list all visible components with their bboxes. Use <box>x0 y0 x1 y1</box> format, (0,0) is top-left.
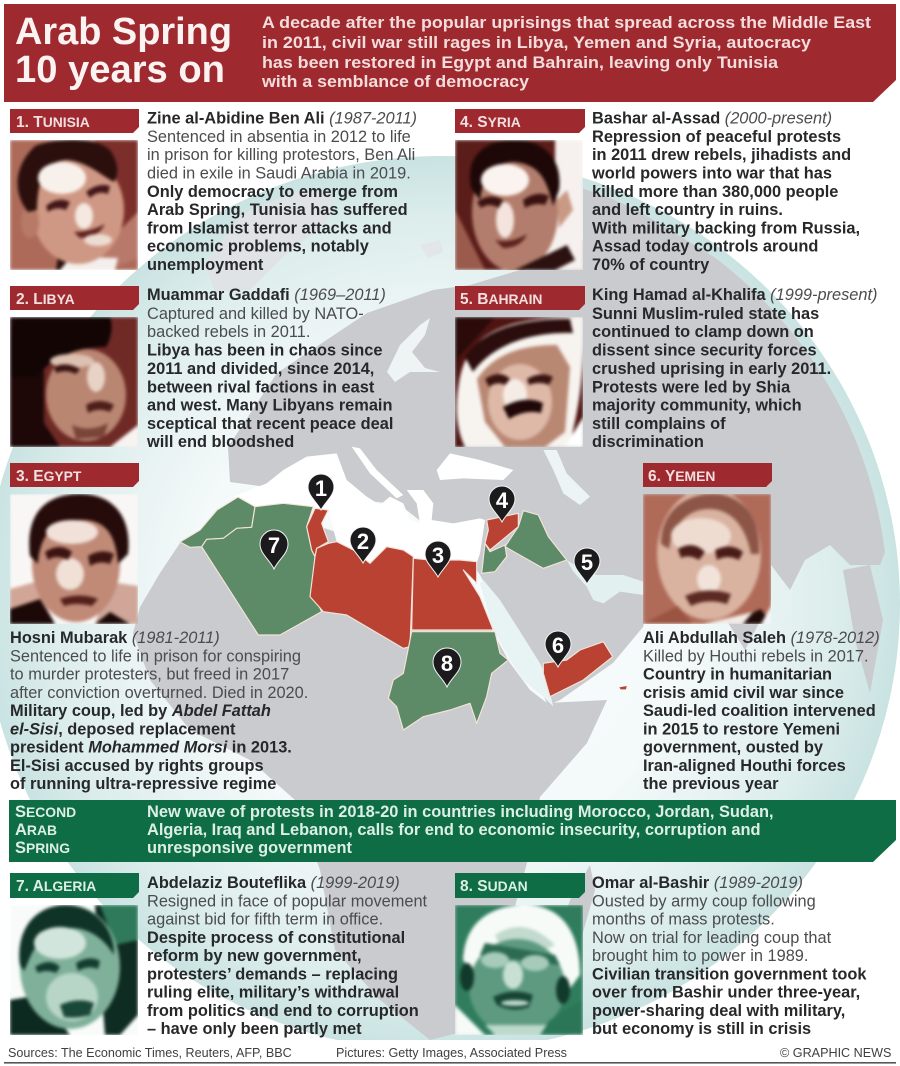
portrait: Mubarak <box>10 494 138 624</box>
banner text <box>147 803 774 857</box>
text: Bouteflika: – have only been partly met <box>147 1020 362 1038</box>
country: Libya <box>310 542 413 648</box>
text: Bouteflika: protesters’ demands – replacing <box>147 966 398 984</box>
country: Morocco <box>180 497 255 547</box>
text: Hamad: still complains of <box>592 415 726 433</box>
intro text: has been restored in Egypt and Bahrain, leaving only Tunisia <box>262 53 779 72</box>
label: Egypt: 3. EGYPT <box>16 468 82 485</box>
text: Assad: in 2011 drew rebels, jihadists and <box>592 146 851 164</box>
text: Bashir <box>592 874 867 1038</box>
text: Assad: killed more than 380,000 people <box>592 183 838 201</box>
portrait: Gaddafi <box>10 317 138 447</box>
text: Assad: Repression of peaceful protests <box>592 128 841 146</box>
text: Gaddafi: between rival factions in east <box>147 378 375 396</box>
text: Gaddafi: backed rebels in 2011. <box>147 323 310 341</box>
pin 7 Algeria: 7 <box>268 533 280 558</box>
header banner <box>4 4 896 102</box>
text: Mubarak: El-Sisi accused by rights groups <box>10 757 264 775</box>
portrait: Saleh <box>643 488 771 624</box>
text: Hamad: majority community, which <box>592 396 802 414</box>
pin 7 Algeria <box>260 530 288 569</box>
text: Bashir: months of mass protests. <box>592 910 775 928</box>
text: Ben Ali: died in exile in Saudi Arabia in 2019. <box>147 164 411 182</box>
banner heading: SECOND <box>15 803 76 821</box>
text: Assad: Assad today controls around <box>592 238 818 256</box>
pin 2 Libya <box>350 527 376 563</box>
banner heading <box>15 803 76 857</box>
banner text: New wave of protests in 2018-20 in countries including Morocco, Jordan, Sudan, <box>147 803 774 821</box>
intro text <box>261 13 871 91</box>
pin 4 Syria <box>489 486 515 522</box>
text: Assad: and left country in ruins. <box>592 201 783 219</box>
text: Saleh: government, ousted by <box>643 738 824 756</box>
intro text: in 2011, civil war still rages in Libya, Yemen and Syria, autocracy <box>262 33 812 52</box>
label: Bahrain: 5. BAHRAIN <box>460 291 542 308</box>
text: Hamad: continued to clamp down on <box>592 323 814 341</box>
text: Ben Ali: Zine al-Abidine Ben Ali (1987-2011) <box>147 110 417 128</box>
label: Libya: 2. LIBYA <box>16 291 75 308</box>
text: Hamad <box>592 286 877 451</box>
map pins <box>260 474 600 687</box>
country: Syria <box>485 513 518 550</box>
label: Sudan: 8. SUDAN <box>460 878 528 895</box>
text: Bouteflika: from politics and end to corruption <box>147 1002 419 1020</box>
label: Syria: 4. SYRIA <box>460 114 521 131</box>
text: Mubarak: Hosni Mubarak (1981-2011) <box>10 629 220 647</box>
text: Hamad: King Hamad al-Khalifa (1999-present) <box>592 286 877 304</box>
banner heading: ARAB <box>15 821 57 839</box>
text: Ben Ali: Sentenced in absentia in 2012 to life <box>147 128 411 146</box>
text: Assad: 70% of country <box>592 256 710 274</box>
portrait: Ben Ali <box>10 140 138 270</box>
country: Iraq <box>505 511 567 568</box>
text: Bashir: Now on trial for leading coup that <box>592 929 832 947</box>
text: Bouteflika: Resigned in face of popular movement <box>147 892 428 910</box>
label: Yemen: 6. YEMEN <box>648 468 715 485</box>
text: Ben Ali: economic problems, notably <box>147 238 370 256</box>
panel: Algeria <box>10 873 428 1038</box>
text: Assad: Bashar al-Assad (2000-present) <box>592 110 832 128</box>
title: 10 years on <box>15 49 225 91</box>
text: Mubarak: Sentenced to life in prison for conspiring <box>10 648 301 666</box>
text: Bouteflika: Abdelaziz Bouteflika (1999-2019) <box>147 874 400 892</box>
country: Sudan <box>388 632 508 730</box>
text: Ben Ali <box>147 110 417 274</box>
footer credits <box>4 1040 896 1064</box>
panel: Syria <box>455 109 860 274</box>
pin 6 Yemen: 6 <box>552 633 564 658</box>
footer credits: Pictures: Getty Images, Associated Press <box>336 1046 567 1060</box>
text: Bouteflika: reform by new government, <box>147 947 362 965</box>
label: Tunisia <box>10 109 139 133</box>
text: Gaddafi: sceptical that recent peace deal <box>147 415 393 433</box>
panel: Sudan <box>455 873 867 1038</box>
text: Saleh: Saudi-led coalition intervened <box>643 702 876 720</box>
intro text: with a semblance of democracy <box>261 72 530 91</box>
pin 4 Syria: 4 <box>496 488 509 513</box>
text: Gaddafi: will end bloodshed <box>146 433 294 451</box>
text: Saleh <box>643 629 880 793</box>
text: Saleh: the previous year <box>643 775 779 793</box>
panel: Yemen <box>643 463 880 793</box>
text: Saleh: crisis amid civil war since <box>643 684 844 702</box>
text: Bashir: Omar al-Bashir (1989-2019) <box>592 874 803 892</box>
pin 5 Bahrain <box>574 548 600 584</box>
pin 1 Tunisia: 1 <box>315 476 327 501</box>
country: Algeria <box>202 503 322 635</box>
text: Hamad: Protests were led by Shia <box>592 378 791 396</box>
label: Yemen <box>643 463 772 487</box>
text: Ben Ali: in prison for killing protestors, Ben Ali <box>147 146 415 164</box>
label: Syria <box>455 109 585 133</box>
text: Bashir: over from Bashir under three-year, <box>592 984 860 1002</box>
banner text: unresponsive government <box>147 839 352 857</box>
panel: Tunisia <box>10 109 417 274</box>
text: Mubarak <box>10 629 308 793</box>
intro text: A decade after the popular uprisings that spread across the Middle East <box>262 13 871 32</box>
footer credits: Sources: The Economic Times, Reuters, AFP, BBC <box>8 1046 292 1060</box>
label: Egypt <box>10 463 139 487</box>
text: Mubarak: after conviction overturned. Died in 2020. <box>10 684 308 702</box>
text: Hamad: discrimination <box>592 433 704 451</box>
text: Bashir: power-sharing deal with military, <box>592 1002 845 1020</box>
text: Gaddafi: Libya has been in chaos since <box>147 342 382 360</box>
country: Tunisia <box>307 508 328 557</box>
label: Algeria <box>10 873 139 898</box>
text: Mubarak: president Mohammed Morsi in 2013. <box>10 738 292 756</box>
text: Gaddafi: Muammar Gaddafi (1969–2011) <box>147 286 386 304</box>
title <box>15 11 232 91</box>
text: Saleh: Killed by Houthi rebels in 2017. <box>643 648 869 666</box>
text: Hamad: Sunni Muslim-ruled state has <box>592 305 819 323</box>
pin 1 Tunisia <box>308 474 334 510</box>
text: Bashir: Civilian transition government took <box>592 966 867 984</box>
text: Bashir: but economy is still in crisis <box>592 1020 811 1038</box>
label: Bahrain <box>455 286 585 310</box>
panel: Libya <box>10 286 393 451</box>
text: Mubarak: to murder protesters, but freed in 2017 <box>10 666 289 684</box>
text: Bashir: Ousted by army coup following <box>592 892 816 910</box>
text: Assad: With military backing from Russia, <box>592 220 860 238</box>
text: Mubarak: Military coup, led by Abdel Fattah <box>10 702 271 720</box>
banner: Second Arab Spring <box>9 800 896 862</box>
pin 2 Libya: 2 <box>357 529 369 554</box>
text: Gaddafi: and west. Many Libyans remain <box>147 396 392 414</box>
text: Assad: world powers into war that has <box>591 164 832 182</box>
label: Tunisia: 1. TUNISIA <box>16 114 90 131</box>
text: Saleh: Country in humanitarian <box>643 666 832 684</box>
text: Gaddafi: Captured and killed by NATO- <box>147 305 364 323</box>
panel: Egypt <box>10 463 308 793</box>
text: Hamad: crushed uprising in early 2011. <box>592 360 831 378</box>
banner heading: SPRING <box>15 839 70 857</box>
text: Ben Ali: Only democracy to emerge from <box>147 183 398 201</box>
text: Ben Ali: from Islamist terror attacks and <box>147 220 392 238</box>
text: Mubarak: el-Sisi, deposed replacement <box>10 720 236 738</box>
country: Jordan and Levant <box>482 543 507 573</box>
portrait: Bouteflika <box>10 905 138 1035</box>
text: Gaddafi: 2011 and divided, since 2014, <box>147 360 374 378</box>
map: Arab Spring countries <box>180 497 627 730</box>
label: Sudan <box>455 873 585 898</box>
pin 3 Egypt: 3 <box>432 543 444 568</box>
portrait: Assad <box>455 140 583 272</box>
text: Bouteflika: ruling elite, military’s withdrawal <box>147 984 399 1002</box>
country: Yemen <box>543 642 627 697</box>
text: Bouteflika <box>147 874 428 1038</box>
pin 3 Egypt <box>425 541 451 577</box>
text: Gaddafi <box>146 286 393 451</box>
pin 6 Yemen <box>545 631 571 667</box>
text: Ben Ali: unemployment <box>147 256 264 274</box>
country: Egypt <box>412 558 493 630</box>
pin 5 Bahrain: 5 <box>581 550 593 575</box>
footer credits: © GRAPHIC NEWS <box>780 1046 891 1060</box>
portrait: Hamad <box>455 317 583 447</box>
title: Arab Spring <box>15 11 232 53</box>
text: Bouteflika: against bid for fifth term in office. <box>147 910 383 928</box>
text: Bouteflika: Despite process of constitutional <box>147 929 405 947</box>
portrait: Bashir <box>455 905 583 1035</box>
text: Mubarak: of running ultra-repressive regime <box>10 775 276 793</box>
pin 8 Sudan: 8 <box>441 651 453 676</box>
text: Saleh: in 2015 to restore Yemeni <box>643 720 840 738</box>
text: Bashir: brought him to power in 1989. <box>592 947 808 965</box>
panel: Bahrain <box>455 286 877 451</box>
banner text: Algeria, Iraq and Lebanon, calls for end to economic insecurity, corruption and <box>147 821 761 839</box>
text: Hamad: dissent since security forces <box>592 342 817 360</box>
text: Assad <box>591 110 860 274</box>
text: Ben Ali: Arab Spring, Tunisia has suffered <box>147 201 408 219</box>
text: Saleh: Iran-aligned Houthi forces <box>643 757 846 775</box>
text: Saleh: Ali Abdullah Saleh (1978-2012) <box>643 629 880 647</box>
label: Algeria: 7. ALGERIA <box>16 878 96 895</box>
label: Libya <box>10 286 139 310</box>
pin 8 Sudan <box>433 648 461 687</box>
